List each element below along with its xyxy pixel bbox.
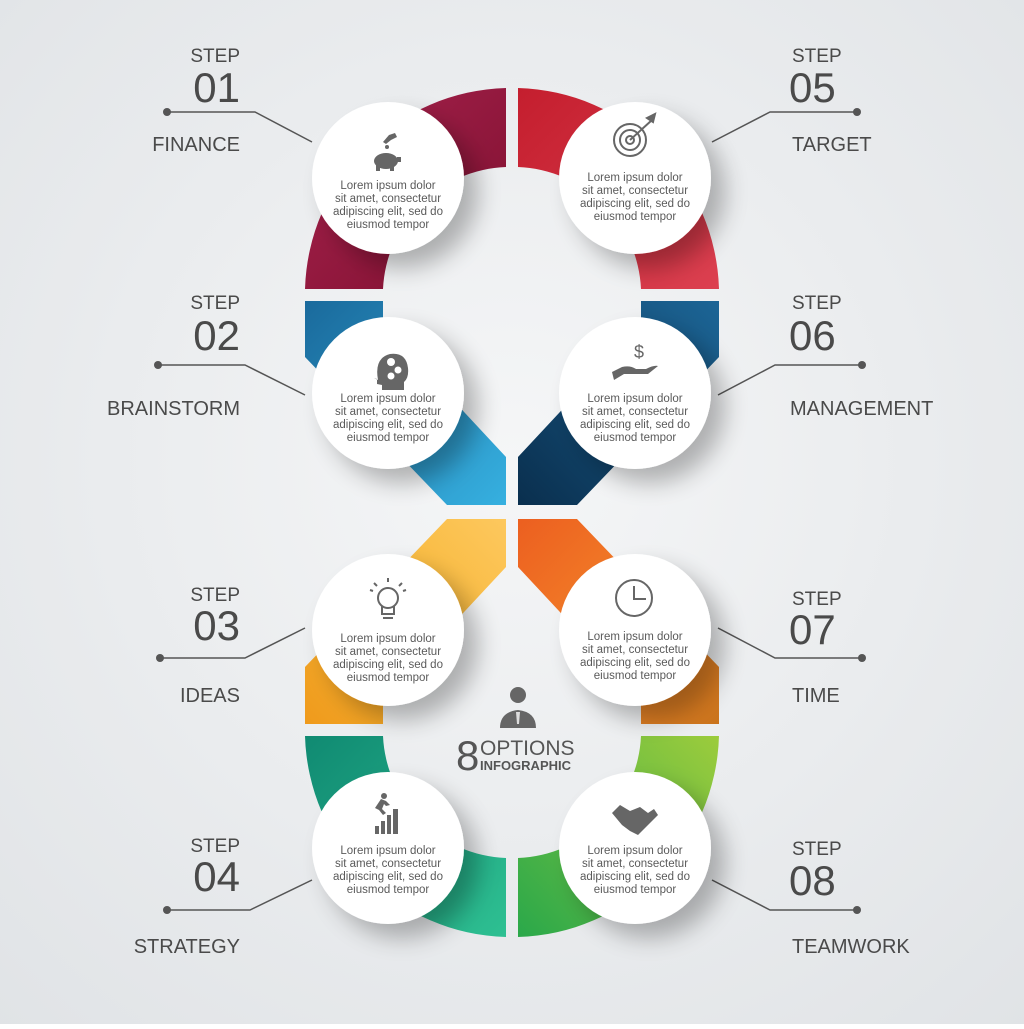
text 6: eiusmod tempor [594,432,676,444]
icon: light bulb [370,578,406,618]
segment: blue left [305,301,506,505]
step 02 label: STEP [190,293,240,314]
center title: 8 [456,732,479,779]
text 7: adipiscing elit, sed do [580,657,690,669]
step 03 label: IDEAS [180,685,240,707]
step 08 label: 08 [789,857,836,904]
step 02 label: BRAINSTORM [107,398,240,420]
center title: OPTIONS [480,737,575,760]
step 06 label: MANAGEMENT [790,398,933,420]
step 01 label: FINANCE [152,134,240,156]
segment: dark blue right [518,301,719,505]
step 03 label: 03 [193,602,240,649]
step 04 label: STEP [190,836,240,857]
step 07 label [789,589,842,707]
text 3: sit amet, consectetur [335,646,441,658]
text 3: eiusmod tempor [347,672,429,684]
text 7: Lorem ipsum dolor [587,631,683,643]
segment: orange [518,519,719,724]
connector lines [158,112,862,910]
text 7: eiusmod tempor [594,670,676,682]
step 03 label: STEP [190,585,240,606]
text 2: adipiscing elit, sed do [333,419,443,431]
text 1: adipiscing elit, sed do [333,206,443,218]
icon: target [614,114,655,156]
step 06 label: 06 [789,312,836,359]
text 8: Lorem ipsum dolor [587,845,683,857]
step 08 label [789,839,910,958]
step 08 label: TEAMWORK [792,936,910,958]
center title: INFOGRAPHIC [480,758,572,773]
text 3: Lorem ipsum dolor [340,633,436,645]
icon: head with gears [374,354,408,390]
step 04 label [134,836,240,958]
text 4: sit amet, consectetur [335,858,441,870]
segment: teal left [305,736,506,937]
segment: top-right red [518,88,719,289]
icon: handshake [612,805,658,835]
segment: green right [518,736,719,937]
step 02 label [107,293,240,420]
text 7: sit amet, consectetur [582,644,688,656]
step 05 label: STEP [792,46,842,67]
icon: piggy bank [374,133,401,171]
text 4: adipiscing elit, sed do [333,871,443,883]
step 07 label: STEP [792,589,842,610]
step 04 label: STRATEGY [134,936,240,958]
text 4: Lorem ipsum dolor [340,845,436,857]
text 4: eiusmod tempor [347,884,429,896]
step labels left [107,46,240,958]
step 06 label [789,293,933,420]
segment: top-left crimson [305,88,506,289]
step 01 label: STEP [190,46,240,67]
text 2: sit amet, consectetur [335,406,441,418]
step 05 label: TARGET [792,134,872,156]
step labels right [789,46,933,958]
icon: businessman [500,687,536,728]
step 07 label: TIME [792,685,840,707]
step 05 label [789,46,872,156]
step 01 label [152,46,240,156]
segment: yellow [305,519,506,724]
step 02 label: 02 [193,312,240,359]
text 5: Lorem ipsum dolor [587,172,683,184]
text 8: eiusmod tempor [594,884,676,896]
circle texts [333,172,690,896]
text 1: eiusmod tempor [347,219,429,231]
text 8: sit amet, consectetur [582,858,688,870]
text 8: adipiscing elit, sed do [580,871,690,883]
text 6: sit amet, consectetur [582,406,688,418]
icon: runner on bars [375,793,398,834]
text 1: Lorem ipsum dolor [340,180,436,192]
step 03 label [180,585,240,707]
step 08 label: STEP [792,839,842,860]
icons [370,114,658,835]
text 2: eiusmod tempor [347,432,429,444]
center title [456,732,575,779]
step 04 label: 04 [193,853,240,900]
step 05 label: 05 [789,64,836,111]
text 5: sit amet, consectetur [582,185,688,197]
figure eight ring [305,88,719,937]
text 6: Lorem ipsum dolor [587,393,683,405]
text 1: sit amet, consectetur [335,193,441,205]
step 01 label: 01 [193,64,240,111]
text 3: adipiscing elit, sed do [333,659,443,671]
step 06 label: STEP [792,293,842,314]
text 6: adipiscing elit, sed do [580,419,690,431]
text 5: adipiscing elit, sed do [580,198,690,210]
text 2: Lorem ipsum dolor [340,393,436,405]
step 07 label: 07 [789,606,836,653]
icon: hand with dollar: $ [634,342,644,362]
text 5: eiusmod tempor [594,211,676,223]
white circles [312,102,711,924]
icon: hand with dollar [612,342,658,380]
icon: clock [616,580,652,616]
